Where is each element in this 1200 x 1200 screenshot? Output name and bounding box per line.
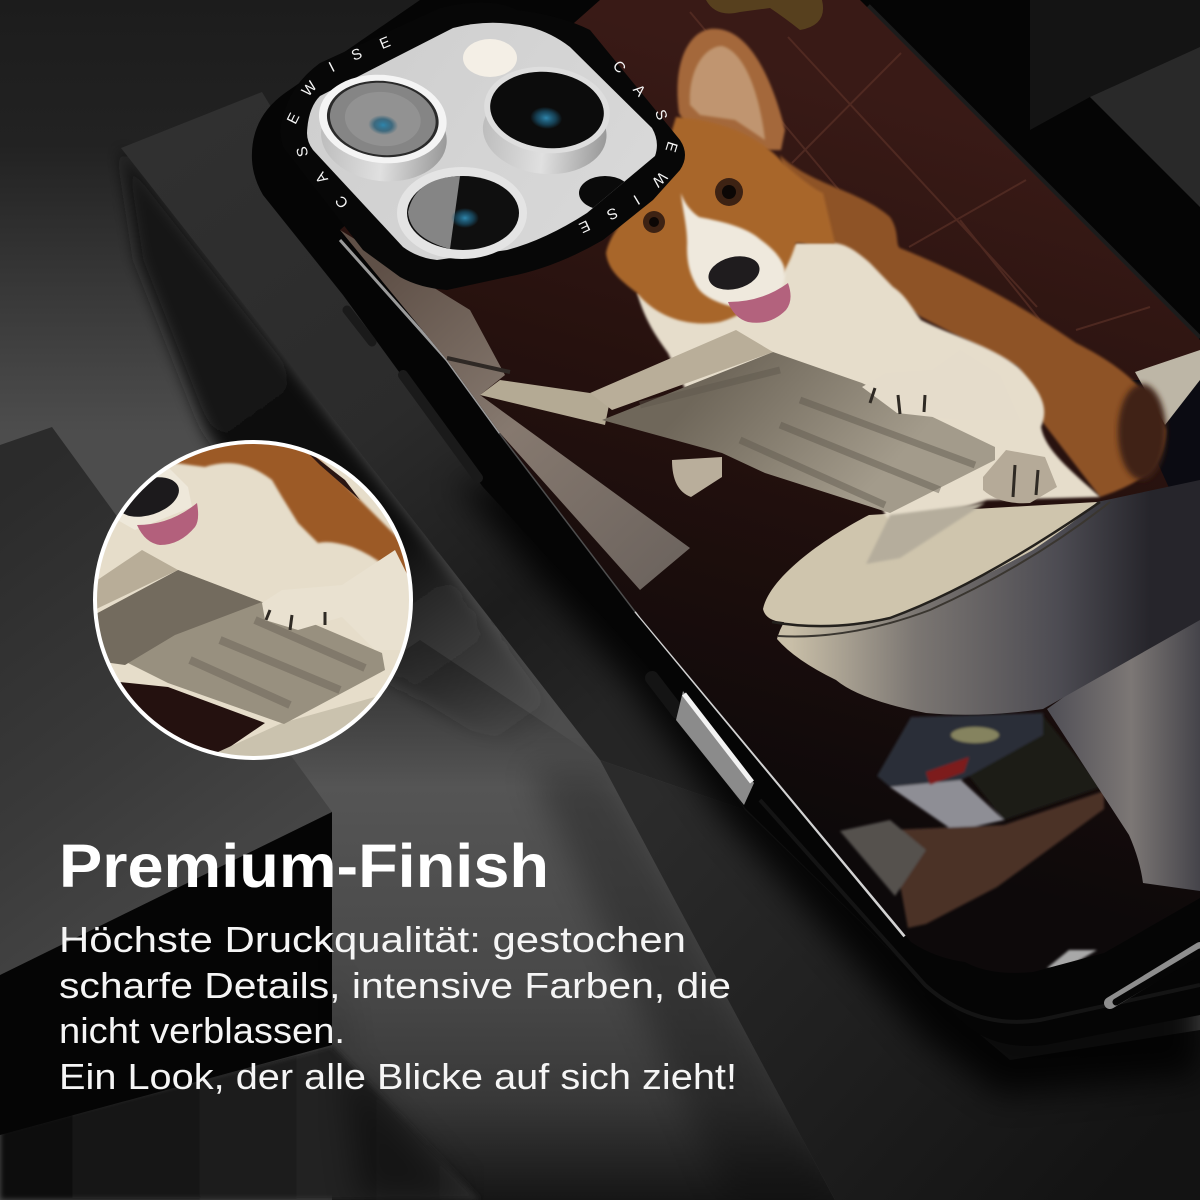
bathroom wall — [340, 0, 1200, 936]
body text: Ein Look, der alle Blicke auf sich zieht! — [59, 1056, 737, 1097]
raised paw — [862, 350, 1020, 420]
top-right black block side — [860, 0, 1200, 400]
zoom inset — [90, 440, 420, 760]
dog rear patch — [1118, 384, 1166, 480]
phone case body — [252, 0, 1200, 1046]
towel — [340, 230, 690, 590]
dog nose — [708, 256, 760, 290]
dog white blaze and muzzle — [681, 193, 785, 308]
plinth bottom shade — [332, 960, 470, 1200]
dog ear — [677, 29, 785, 150]
side button: middle — [403, 375, 478, 478]
red tube — [926, 757, 969, 785]
white rag — [1047, 950, 1097, 972]
cloth — [840, 820, 926, 896]
lens: left — [313, 69, 453, 188]
dog fur in seat — [866, 503, 985, 564]
left paw — [672, 457, 722, 497]
inset ring — [95, 442, 411, 758]
bucket — [969, 716, 1101, 820]
case gloss middle — [500, 433, 640, 617]
upper leaf — [590, 330, 773, 410]
inset tongue — [137, 503, 198, 545]
lower-left block floor — [0, 1045, 480, 1200]
bag — [877, 713, 1043, 787]
inset orange fur — [175, 440, 420, 600]
floor clutter — [840, 713, 1104, 972]
seat lower line — [778, 502, 1110, 636]
heading: Premium-Finish — [59, 832, 549, 900]
left page tip — [480, 380, 610, 425]
newspaper — [480, 330, 995, 513]
top-right block — [1090, 47, 1200, 207]
button highlight — [684, 694, 752, 782]
brass fitting — [706, 0, 823, 30]
paper — [951, 727, 999, 743]
body text: scharfe Details, intensive Farben, die — [59, 965, 731, 1006]
side button: silver — [652, 678, 754, 805]
inset dark floor — [100, 680, 265, 760]
phone — [252, 0, 1200, 1098]
print lines — [640, 370, 975, 505]
right paw — [983, 450, 1057, 503]
brand text: left: CASEWISE — [286, 36, 391, 208]
inset dark corner — [300, 445, 360, 500]
dark corner behind toilet — [1131, 380, 1200, 486]
inset muzzle — [100, 467, 192, 530]
charging port — [1110, 948, 1200, 1003]
rug — [890, 791, 1104, 928]
side button: upper — [347, 310, 372, 342]
toilet bowl — [777, 480, 1200, 715]
dog inner ear — [690, 46, 765, 140]
inset paw — [262, 550, 420, 650]
soft diagonal shadow — [530, 770, 840, 1200]
inset newspaper — [90, 550, 385, 724]
dog paws — [672, 384, 1057, 504]
main plinth side shadow — [121, 148, 600, 775]
dog head — [606, 117, 835, 323]
seat shadow line — [772, 502, 1100, 626]
brand text: right: CASEWISE — [578, 62, 678, 234]
phone shadow — [455, 480, 1200, 1095]
body text: Höchste Druckqualität: gestochen — [59, 919, 686, 960]
dog tongue — [728, 283, 791, 323]
lower-left block front — [0, 812, 332, 1135]
claws — [870, 388, 1038, 497]
tank edge — [1135, 350, 1200, 425]
screen artwork — [340, 0, 1200, 968]
top-right dark area — [860, 0, 1200, 400]
inset content — [90, 440, 420, 760]
inset toilet — [200, 650, 420, 760]
sensor hole — [579, 176, 631, 210]
case right edge — [868, 6, 1200, 338]
camera frame — [280, 2, 685, 290]
body text — [59, 919, 737, 1097]
label — [890, 780, 1004, 831]
dog eyes — [643, 178, 743, 233]
case gloss edge — [340, 240, 500, 433]
inset fur — [90, 440, 420, 760]
dog back fur — [780, 155, 1166, 497]
towel fold — [447, 358, 510, 372]
lens: right — [478, 61, 614, 180]
toilet seat — [763, 502, 1097, 625]
main plinth top — [121, 92, 745, 810]
inset nose — [112, 470, 184, 524]
wall tiles — [690, 12, 1150, 330]
toilet base — [1047, 600, 1200, 891]
case lower rim — [760, 800, 1200, 1022]
case gloss highlight — [636, 611, 905, 936]
camera island — [286, 22, 685, 290]
camera glass — [307, 23, 657, 260]
flash — [463, 39, 517, 77]
lower-left block top — [0, 427, 332, 975]
main pages — [602, 352, 995, 513]
lens grey half — [408, 176, 460, 249]
lower right surface — [600, 760, 1200, 1200]
button face — [676, 691, 754, 805]
lit plinth surface — [295, 640, 835, 1200]
lens: bottom — [397, 167, 527, 259]
button cavity — [652, 678, 678, 712]
dog white chest and belly — [637, 243, 1100, 530]
body text: nicht verblassen. — [59, 1010, 345, 1051]
